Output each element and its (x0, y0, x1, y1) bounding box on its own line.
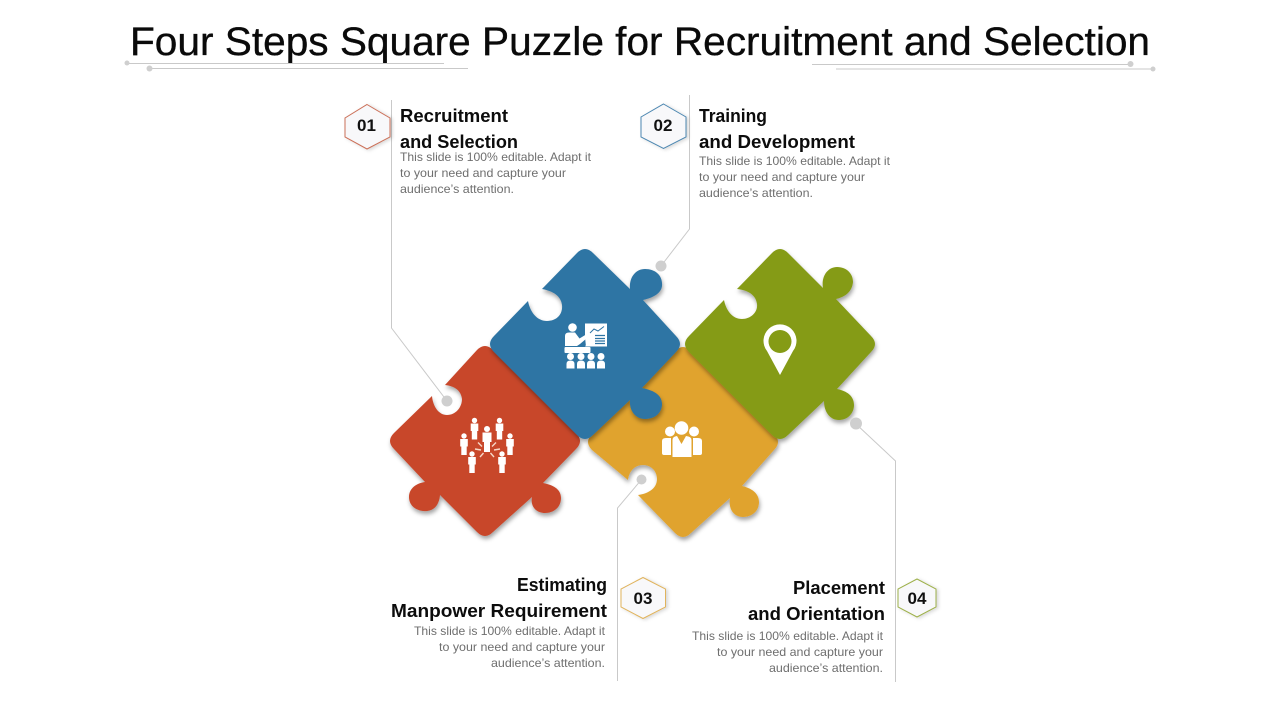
step 02 text: and Development (699, 132, 855, 152)
icon: team of three (662, 421, 702, 457)
step 03 text: Estimating (517, 575, 607, 595)
step 03 text: to your need and capture your (439, 640, 605, 654)
step badge 04 (898, 579, 936, 617)
icon: trainer and audience (564, 323, 607, 368)
step 01 text: Recruitment (400, 106, 508, 126)
step 01 text: This slide is 100% editable. Adapt it (400, 150, 592, 164)
step 04 text: Placement (793, 578, 885, 598)
step 01 text: to your need and capture your (400, 166, 566, 180)
title rule: left (124, 60, 468, 72)
leader line 3 (618, 474, 646, 681)
leader line 1 (392, 100, 452, 406)
step badge 02: 02 (654, 116, 672, 135)
step badge 04: 04 (908, 589, 927, 608)
step 01 text (400, 106, 592, 196)
step 03 text (391, 575, 607, 670)
title: Four Steps Square Puzzle for Recruitment and Selection (130, 20, 1150, 64)
puzzle piece 2: blue (490, 249, 680, 439)
step 04 text: to your need and capture your (717, 645, 883, 659)
icon: location pin (763, 324, 796, 375)
icon: network of people (460, 418, 514, 473)
step 03 text: Manpower Requirement (391, 601, 607, 621)
step 04 text: and Orientation (748, 604, 885, 624)
step 04 text (692, 578, 885, 675)
puzzle piece 3: yellow (588, 347, 778, 537)
step badge 03: 03 (634, 589, 652, 608)
title rule: right (812, 61, 1156, 72)
step 04 text: audience’s attention. (769, 661, 883, 675)
step badge 03 (621, 578, 666, 618)
step 02 text: This slide is 100% editable. Adapt it (699, 154, 891, 168)
step 04 text: This slide is 100% editable. Adapt it (692, 629, 884, 643)
leader line 2 (656, 95, 690, 272)
step 02 text (699, 106, 891, 200)
step 01 text: and Selection (400, 132, 518, 152)
step 01 text: audience’s attention. (400, 182, 514, 196)
puzzle piece 1: red (390, 346, 580, 536)
step 02 text: to your need and capture your (699, 170, 865, 184)
step 02 text: Training (699, 106, 767, 126)
step 03 text: audience’s attention. (491, 656, 605, 670)
step badge 02 (641, 104, 686, 148)
step badge 01 (345, 104, 390, 149)
step 02 text: audience’s attention. (699, 186, 813, 200)
puzzle piece 4: green (685, 249, 875, 439)
leader line 4 (850, 418, 896, 682)
step 03 text: This slide is 100% editable. Adapt it (414, 624, 606, 638)
step badge 01: 01 (357, 116, 376, 135)
